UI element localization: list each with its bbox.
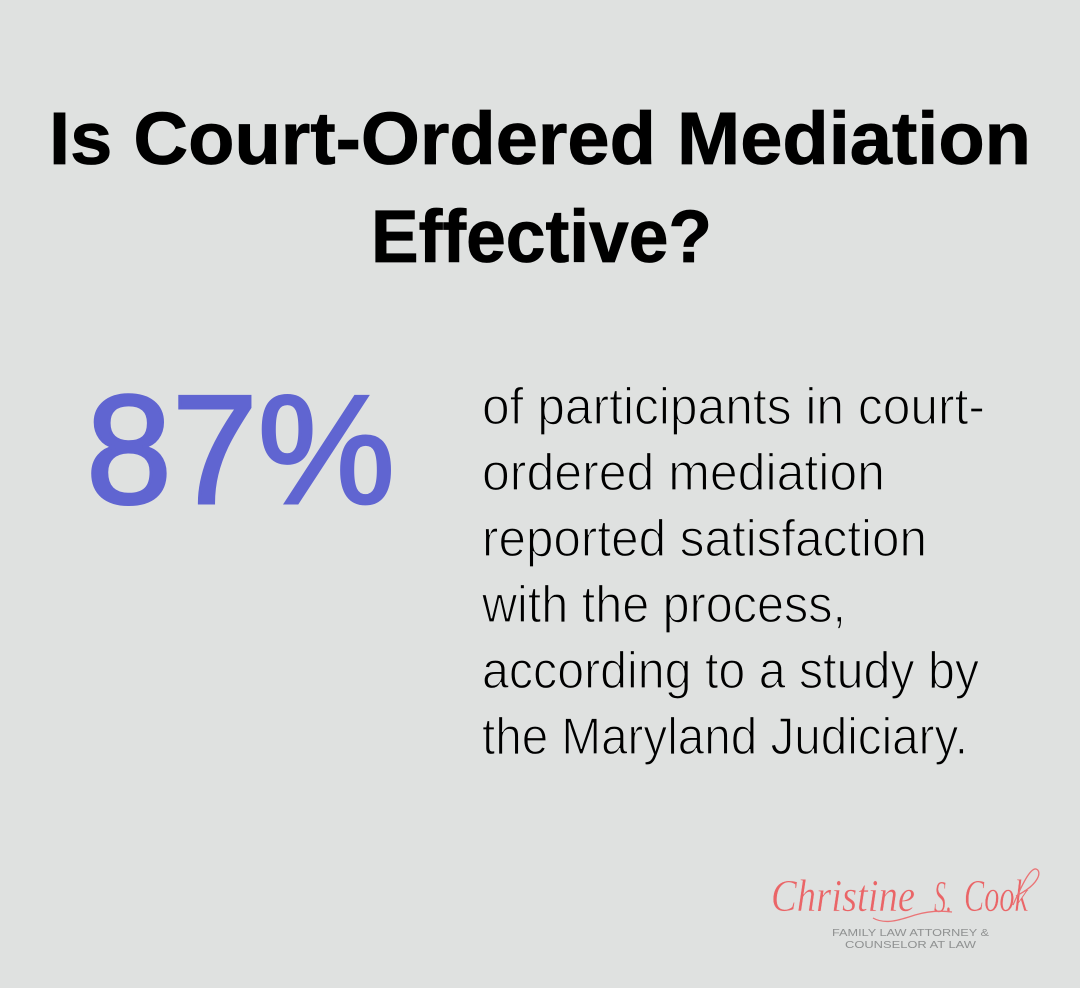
description text: according to a study by	[482, 642, 979, 700]
description text: with the process,	[481, 576, 846, 634]
description text	[481, 378, 985, 766]
description text: the Maryland Judiciary.	[482, 708, 968, 766]
title	[49, 97, 1031, 278]
statistic: 87%: 87%	[86, 363, 395, 536]
description text: ordered mediation	[482, 444, 885, 502]
logo name	[771, 870, 1029, 922]
logo tagline: FAMILY LAW ATTORNEY &	[832, 927, 989, 939]
logo name: Cook	[964, 870, 1029, 921]
logo name: S.	[934, 871, 952, 922]
logo: Christine S. Cook	[771, 869, 1039, 951]
logo tagline: COUNSELOR AT LAW	[845, 939, 976, 951]
title: Effective?	[371, 195, 712, 278]
logo tagline	[832, 927, 989, 951]
logo name: Christine	[771, 870, 915, 921]
logo flourish: swash and k loop	[873, 869, 1039, 921]
title: Is Court-Ordered Mediation	[49, 97, 1031, 180]
description text: reported satisfaction	[482, 510, 927, 568]
description text: of participants in court-	[482, 378, 985, 436]
